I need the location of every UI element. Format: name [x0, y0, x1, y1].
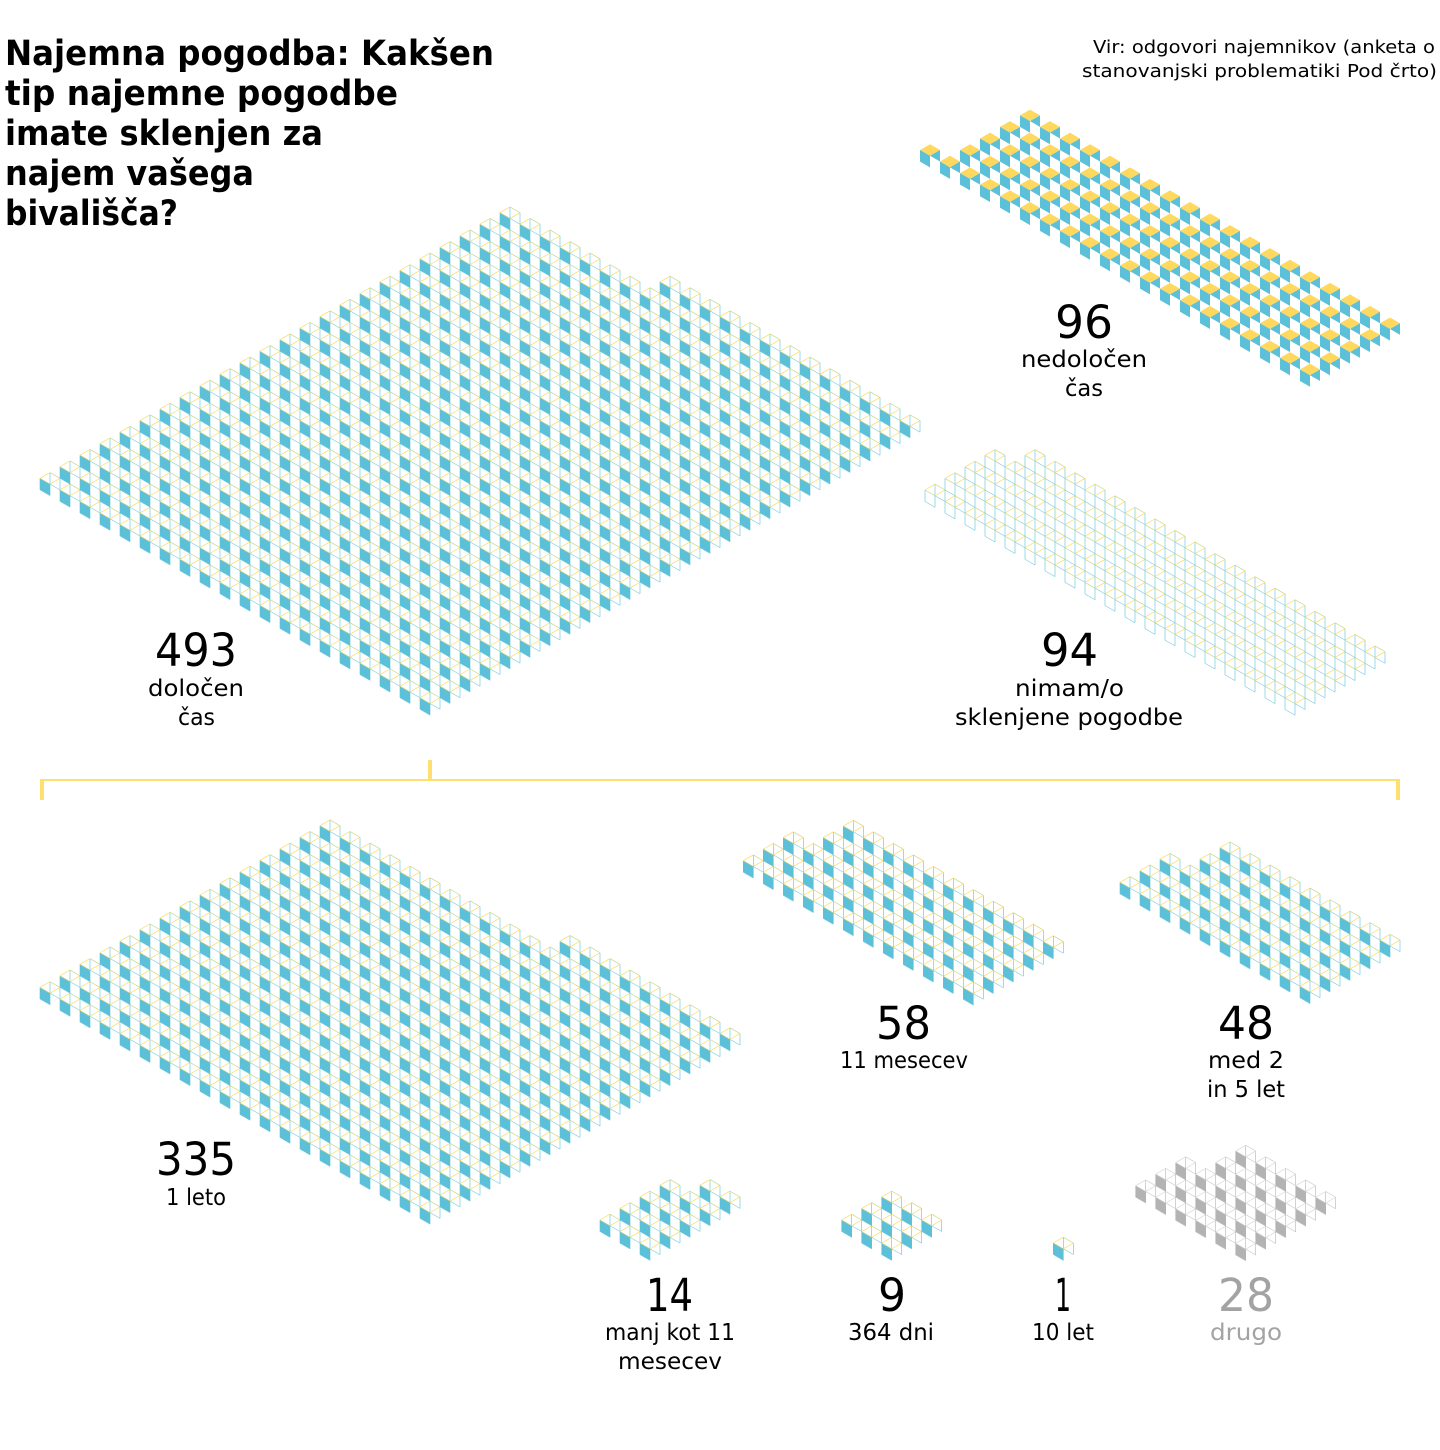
number: 28: 28: [1218, 1269, 1274, 1322]
number: 335: 335: [156, 1133, 236, 1186]
title: tip najemne pogodbe: [5, 74, 398, 114]
cube grid: 9: [842, 1191, 942, 1260]
label: 1 leto: 1 leto: [166, 1185, 226, 1211]
panel: 493 določen čas: [40, 207, 920, 731]
title: imate sklenjen za: [5, 114, 323, 154]
label: manj kot 11 mesecev: manj kot 11: [605, 1320, 735, 1346]
bracket connector: [40, 760, 1400, 800]
cube grid: 335: [40, 820, 740, 1224]
title: [5, 34, 494, 234]
number: 1: 1: [1055, 1269, 1071, 1322]
number: 493: 493: [155, 624, 237, 677]
cube grid: 58: [743, 820, 1063, 1005]
label: nimam/o sklenjene pogodbe: nimam/o: [1015, 676, 1124, 702]
panel: 1 10 let: [1032, 1237, 1094, 1346]
source note: [1082, 37, 1437, 82]
number: 48: 48: [1218, 997, 1274, 1050]
title: najem vašega: [5, 154, 254, 194]
source note: Vir: odgovori najemnikov (anketa o: [1093, 37, 1435, 58]
cube grid: 96: [920, 110, 1400, 387]
label: med 2 in 5 let: in 5 let: [1207, 1077, 1285, 1103]
panel: 28 drugo: [1136, 1145, 1336, 1346]
label: 364 dni: 364 dni: [848, 1320, 934, 1346]
cube: 1: [1053, 1237, 1073, 1260]
label: nedoločen čas: [1021, 347, 1147, 402]
label: med 2 in 5 let: med 2: [1208, 1048, 1284, 1074]
label: 10 let: 10 let: [1032, 1320, 1094, 1346]
label: nedoločen čas: nedoločen: [1021, 347, 1147, 373]
number: 9: 9: [878, 1269, 906, 1322]
cube grid: 14: [600, 1180, 740, 1260]
label: med 2 in 5 let: [1207, 1048, 1285, 1103]
label: nedoločen čas: čas: [1065, 376, 1103, 402]
panel: 96 nedoločen čas: [920, 110, 1400, 402]
cube grid: 28: [1136, 1145, 1336, 1261]
panel: 14 manj kot 11 mesecev: [600, 1180, 740, 1375]
panel: 9 364 dni: [842, 1191, 942, 1346]
cube grid: 48: [1120, 842, 1400, 1004]
number: 94: 94: [1041, 624, 1098, 677]
panel: 58 11 mesecev: [743, 820, 1063, 1074]
label: drugo: drugo: [1210, 1320, 1282, 1346]
label: določen čas: določen: [148, 676, 244, 702]
number: 58: 58: [876, 997, 931, 1050]
cube grid: 94: [925, 450, 1385, 715]
label: nimam/o sklenjene pogodbe: sklenjene pogodbe: [955, 705, 1183, 731]
cube grid: 493: [40, 207, 920, 715]
panel: 48 med 2 in 5 let: [1120, 842, 1400, 1103]
number: 14: 14: [646, 1269, 693, 1322]
label: nimam/o sklenjene pogodbe: [955, 676, 1183, 731]
label: manj kot 11 mesecev: [605, 1320, 735, 1375]
label: 11 mesecev: 11 mesecev: [840, 1048, 968, 1074]
label: določen čas: [148, 676, 244, 731]
panel: 94 nimam/o sklenjene pogodbe: [925, 450, 1385, 731]
title: Najemna pogodba: Kakšen: [5, 34, 494, 74]
label: določen čas: čas: [178, 705, 215, 731]
title: bivališča?: [5, 194, 178, 234]
label: manj kot 11 mesecev: mesecev: [618, 1349, 722, 1375]
panel: 335 1 leto: [40, 820, 740, 1224]
number: 96: 96: [1055, 296, 1113, 349]
source note: stanovanjski problematiki Pod črto): [1082, 61, 1437, 82]
